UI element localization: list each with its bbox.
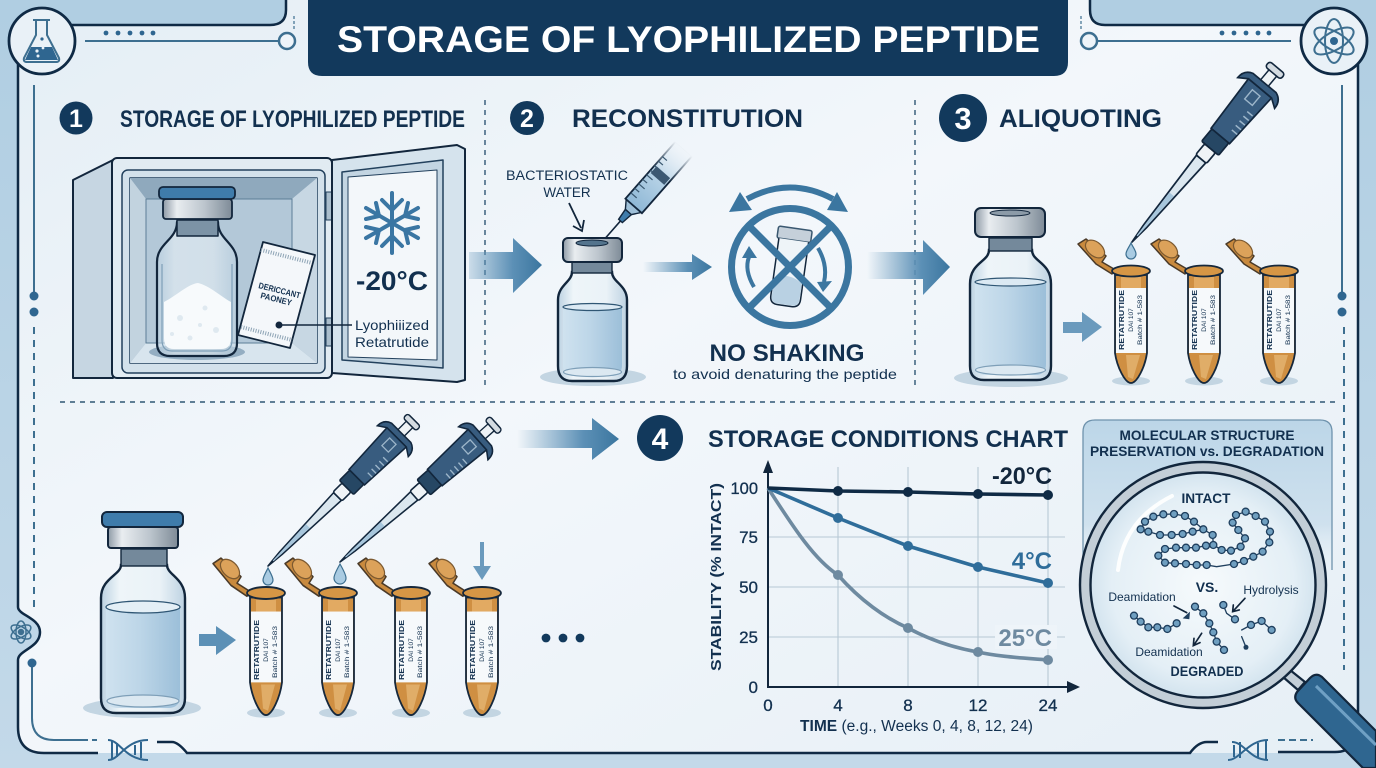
tube: lower second: [285, 555, 357, 718]
x tick labels: 0: [763, 696, 773, 715]
magnifier lens: [1080, 462, 1326, 708]
pipette: step 3: [1114, 52, 1296, 257]
icon: DNA bottom left: [108, 740, 148, 760]
tube: step 3 first: Batch # 1-583: [1137, 295, 1144, 345]
label: bacteriostatic water: [506, 168, 628, 231]
x tick labels: 24: [1039, 696, 1057, 715]
degraded fragments: [1134, 605, 1272, 650]
panel: freezer: [73, 145, 465, 382]
tube: lower third: RETATRUTIDE: [397, 620, 406, 680]
heading: step 1: 1: [69, 105, 83, 133]
title banner: STORAGE OF LYOPHILIZED PEPTIDE: [337, 19, 1040, 60]
heading: step 2: RECONSTITUTION: [572, 105, 803, 133]
tube: lower third: DAI 107: [408, 638, 415, 662]
freezer door: [332, 145, 465, 382]
icon: DNA bottom right: [1228, 740, 1268, 760]
arrow: down into tube: [473, 542, 491, 580]
double arrow: [729, 188, 848, 212]
tube: lower first: DAI 107: [263, 638, 270, 662]
series labels: 25°C: [998, 625, 1052, 652]
y tick labels: [730, 480, 758, 697]
pipette: lower first: [253, 404, 430, 581]
deamidation label upper: Deamidation: [1108, 590, 1176, 604]
chart: storage conditions: [708, 460, 1080, 735]
droplet: lower second: [334, 564, 346, 584]
tube: lower fourth: RETATRUTIDE: [468, 620, 477, 680]
molecule chains: [1134, 512, 1272, 650]
tube: step 3 third: [1226, 237, 1298, 386]
y tick labels: 0: [749, 678, 758, 697]
intact label: INTACT: [1182, 490, 1231, 506]
series: -20C: [768, 486, 1053, 500]
icon: snowflake: [366, 193, 418, 253]
text: no shaking: to avoid denaturing the peptide: [673, 366, 897, 382]
arrow: to no shaking: [643, 254, 712, 280]
degraded label: DEGRADED: [1170, 663, 1244, 679]
tube: step 3 first: RETATRUTIDE: [1117, 290, 1126, 350]
tube: lower fourth: DAI 107: [479, 638, 486, 662]
tube: step 3 second: DAI 107: [1201, 308, 1208, 332]
heading: step 4: [637, 415, 1068, 461]
tube: lower first: RETATRUTIDE: [252, 620, 261, 680]
grid lines: [768, 467, 1065, 687]
tube: step 3 second: Batch # 1-583: [1210, 295, 1217, 345]
x tick labels: 12: [969, 696, 987, 715]
tube: step 3 second: [1151, 237, 1223, 386]
series: 25C: [768, 488, 1053, 665]
arrow: step 1 to 2: [469, 238, 542, 293]
desiccant packet: [238, 242, 315, 348]
heading: step 3: ALIQUOTING: [999, 105, 1162, 133]
tube: step 3 first: DAI 107: [1128, 308, 1135, 332]
tube: lower first: [213, 555, 285, 718]
panel: molecular structure: [1080, 420, 1376, 768]
icon: small atom on left edge: [9, 621, 33, 643]
tube: step 3 second: RETATRUTIDE: [1190, 290, 1199, 350]
label: bacteriostatic water: WATER: [543, 185, 591, 200]
heading: step 1: [60, 102, 465, 134]
y tick labels: 25: [739, 628, 758, 647]
arrow: vial to tubes, step 3: [1063, 312, 1102, 342]
x axis title: TIME (e.g., Weeks 0, 4, 8, 12, 24): [800, 718, 1033, 735]
x tick labels: 4: [833, 696, 843, 715]
droplet: lower first: [263, 568, 273, 585]
arrow: vial to tubes, lower row: [199, 626, 236, 655]
tube: step 3 third: Batch # 1-583: [1285, 295, 1292, 345]
tube: step 3 third: RETATRUTIDE: [1265, 290, 1274, 350]
y tick labels: 50: [739, 578, 758, 597]
heading: step 2: [510, 101, 803, 135]
y tick labels: 75: [739, 528, 758, 547]
heading: step 3: 3: [954, 101, 972, 136]
text: no shaking: [673, 340, 897, 382]
continuation dots: [542, 634, 584, 642]
panel title: [1090, 428, 1324, 459]
tube: lower second: Batch # 1-583: [344, 626, 351, 678]
heading: step 2: 2: [520, 105, 534, 133]
deamidation label lower: Deamidation: [1135, 645, 1203, 659]
heading: step 4: STORAGE CONDITIONS CHART: [708, 426, 1068, 453]
tube: lower fourth: Batch # 1-583: [488, 626, 495, 678]
y tick labels: 100: [730, 480, 758, 498]
vs label: VS.: [1196, 579, 1218, 595]
vial: step 3: [954, 208, 1068, 387]
label: bacteriostatic water: BACTERIOSTATIC: [506, 168, 628, 183]
tube: lower third: [358, 555, 430, 718]
panel title: PRESERVATION vs. DEGRADATION: [1090, 444, 1324, 459]
desiccant packet: DERICCANT: [258, 280, 302, 301]
y axis title: STABILITY (% INTACT): [708, 483, 725, 671]
magnifier handle: [1275, 662, 1376, 768]
series labels: [992, 463, 1057, 652]
series: 4C: [768, 488, 1053, 588]
tube: lower second: RETATRUTIDE: [324, 620, 333, 680]
tilted vial: [768, 226, 812, 308]
intact chain: [1141, 512, 1270, 567]
leader line and label: Lyophiiized: [355, 317, 429, 333]
tube: step 3 first: [1078, 237, 1150, 386]
vial: lower row: [83, 512, 201, 718]
arrow: step 2 to 3: [867, 240, 950, 295]
heading: step 3: [939, 94, 1162, 142]
tube: lower third: Batch # 1-583: [417, 626, 424, 678]
hydrolysis label: Hydrolysis: [1243, 583, 1299, 597]
section dividers: [60, 100, 1340, 402]
tube: lower fourth: [429, 555, 501, 718]
heading: step 4: 4: [652, 423, 669, 456]
tube: lower first: Batch # 1-583: [272, 626, 279, 678]
series labels: 4°C: [1012, 548, 1052, 575]
icon: atom: [1301, 8, 1367, 74]
heading: step 1: STORAGE OF LYOPHILIZED PEPTIDE: [120, 106, 465, 133]
leader line and label: [276, 317, 429, 350]
vial: reconstituted: [540, 238, 646, 386]
rotation arrows: [742, 246, 832, 292]
pointer arrows: [1174, 598, 1245, 646]
axes: [763, 460, 1080, 693]
x tick labels: 8: [903, 696, 913, 715]
temperature label: -20°C: [356, 266, 428, 296]
icon: flask: [9, 8, 75, 74]
icon: no shaking: [729, 188, 848, 326]
panel title: MOLECULAR STRUCTURE: [1120, 428, 1294, 443]
title banner: [308, 0, 1068, 76]
arrow: to step 4: [517, 418, 619, 460]
text: no shaking: NO SHAKING: [710, 340, 864, 367]
x tick labels: [763, 696, 1057, 715]
vial with lyophilized powder: [149, 187, 245, 360]
droplet: step 3: [1126, 243, 1136, 259]
tube: step 3 third: DAI 107: [1276, 308, 1283, 332]
leader line and label: Retatrutide: [355, 334, 429, 350]
tube: lower second: DAI 107: [335, 638, 342, 662]
syringe: [594, 142, 692, 249]
pipette: lower second: [325, 407, 511, 578]
series labels: -20°C: [992, 463, 1052, 490]
desiccant packet: PAONEY: [260, 290, 293, 308]
